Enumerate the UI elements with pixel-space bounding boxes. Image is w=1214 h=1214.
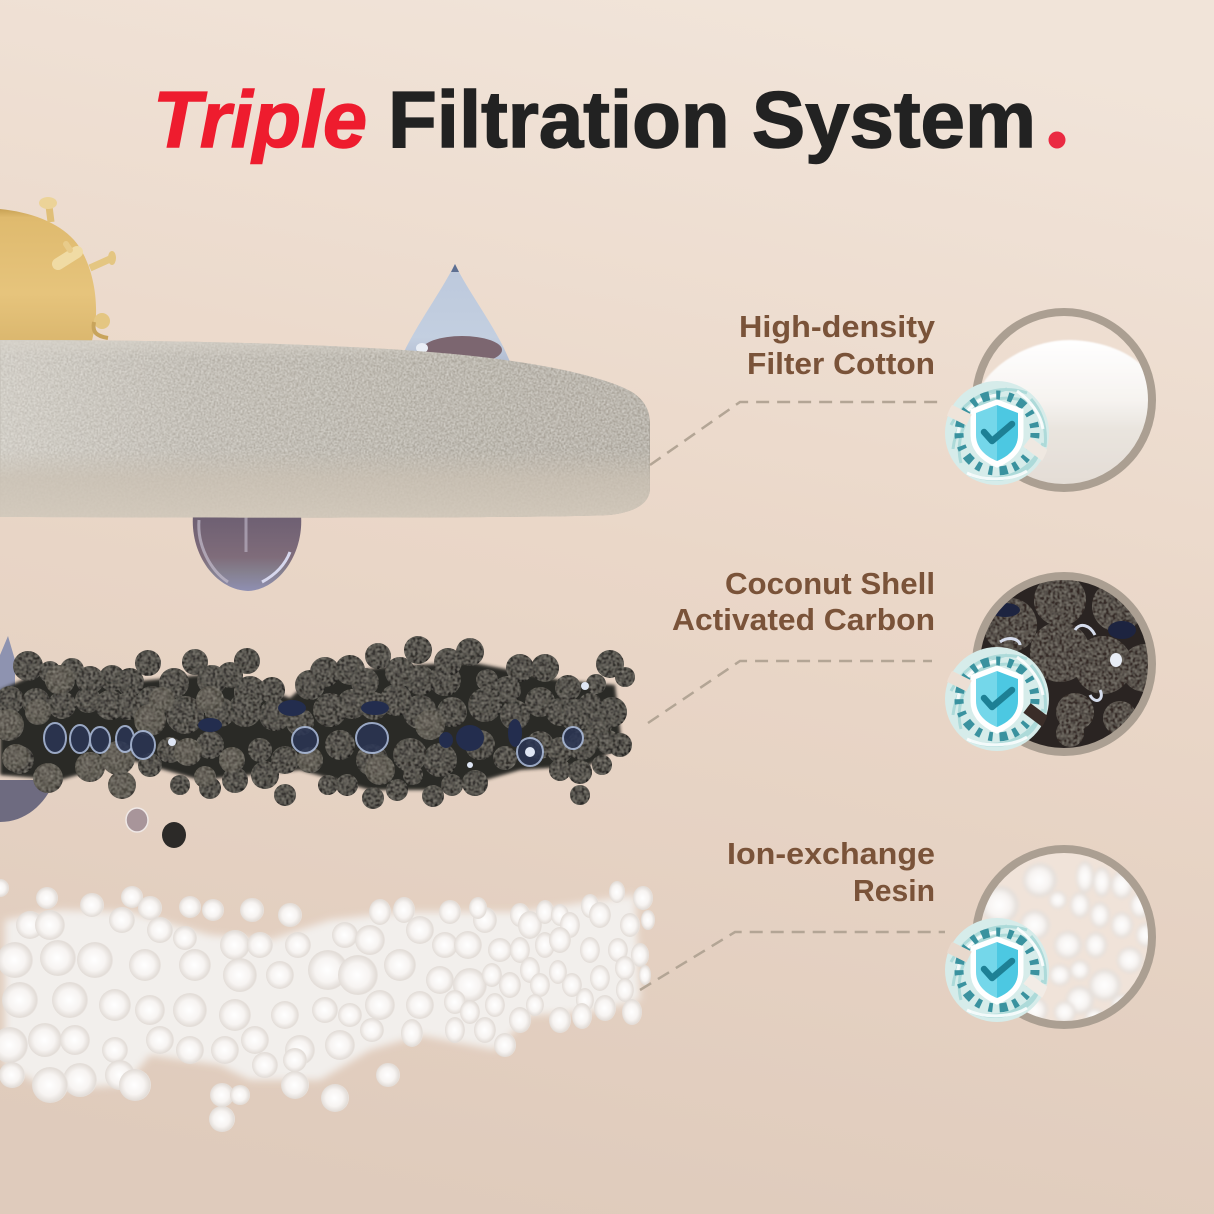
label: coconut shell activated carbon: Activated Carbon bbox=[672, 602, 935, 637]
panel: filter cotton disc bbox=[0, 340, 650, 518]
lighter carbon beads bbox=[0, 665, 445, 799]
callout line: ion-exchange resin bbox=[640, 932, 945, 990]
small falling particles bbox=[126, 808, 186, 848]
label: high-density filter cotton bbox=[739, 309, 936, 381]
icon: shield badge, filter cotton bbox=[941, 381, 1055, 485]
icon: water droplet on top of filter bbox=[404, 264, 510, 364]
title: Triple bbox=[153, 75, 367, 164]
dark blue gaps in carbon bbox=[198, 700, 522, 751]
white sparkles on carbon bbox=[168, 682, 589, 768]
label: ion-exchange resin bbox=[727, 836, 935, 908]
label: high-density filter cotton: Filter Cotton bbox=[747, 346, 935, 381]
label: ion-exchange resin: Ion-exchange bbox=[727, 836, 935, 871]
panel: ion-exchange resin layer bbox=[0, 879, 655, 1132]
resin base mass bbox=[5, 895, 640, 1090]
icon: gold virus particle bbox=[0, 197, 116, 350]
carbon base mass bbox=[0, 662, 622, 790]
inset: activated carbon bbox=[975, 574, 1169, 752]
label: high-density filter cotton: High-density bbox=[739, 309, 936, 344]
label: coconut shell activated carbon: Coconut Shell bbox=[725, 566, 935, 601]
label: coconut shell activated carbon bbox=[672, 566, 935, 637]
title: Filtration System bbox=[388, 75, 1036, 164]
water glints between carbon beads bbox=[44, 723, 583, 766]
icon: shield badge, resin bbox=[941, 918, 1055, 1022]
inset: ion-exchange resin bbox=[976, 849, 1160, 1028]
icon: shield badge, activated carbon bbox=[941, 647, 1055, 751]
label: ion-exchange resin: Resin bbox=[853, 873, 935, 908]
callout line: activated carbon bbox=[648, 661, 932, 723]
title: . bbox=[1046, 75, 1068, 164]
carbon beads bbox=[0, 636, 635, 809]
icon: water droplet under filter bbox=[193, 515, 301, 591]
panel: activated carbon layer bbox=[0, 636, 635, 822]
small elongated resin beads, right side bbox=[369, 881, 655, 1057]
resin beads bbox=[0, 879, 512, 1132]
left droplet fragments bbox=[0, 636, 15, 690]
inset: filter cotton bbox=[975, 312, 1155, 490]
callout line: filter cotton bbox=[650, 402, 940, 465]
